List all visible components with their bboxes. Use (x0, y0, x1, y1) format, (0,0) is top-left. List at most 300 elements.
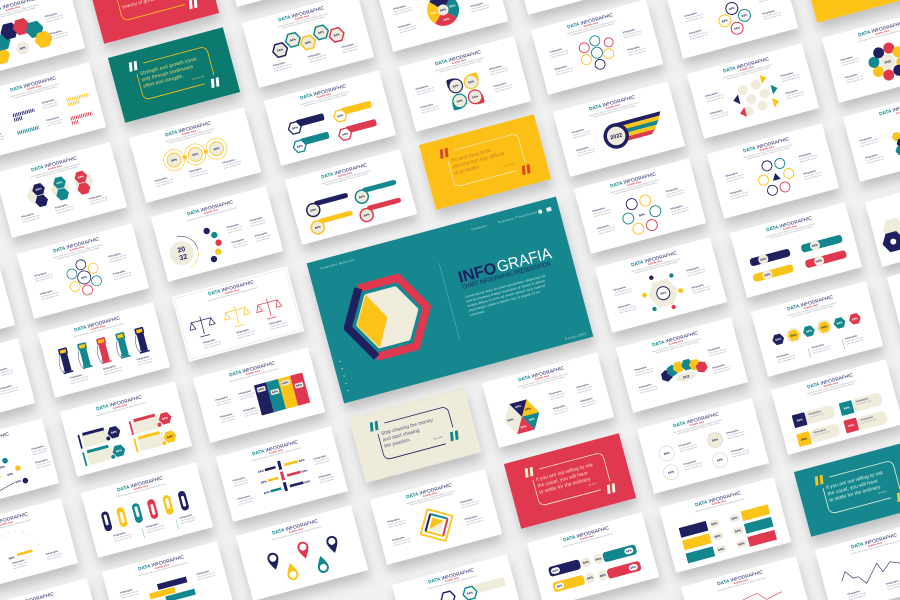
text block: Lorem ipsum dolor sit (203, 340, 222, 347)
heading: Subtitle Here (269, 448, 284, 455)
text block: Infographic (155, 176, 169, 183)
arc blocks chart: 2022 (682, 374, 690, 380)
text block: Infographic (859, 136, 873, 142)
side dots (339, 361, 349, 391)
slide: petals with arrows (707, 123, 839, 219)
text block: amet consectetur elit (22, 216, 40, 224)
heading: Subtitle Here (317, 92, 332, 99)
text block: Lorem ipsum dolor (216, 398, 232, 405)
cover header labels: Business Presentation (498, 210, 538, 224)
four squares chart: 64% (848, 423, 855, 428)
text block: Infographic (725, 172, 739, 178)
chart values: 64% (638, 212, 646, 218)
slide: map pins (236, 505, 368, 600)
heading: DATA INFOGRAPHIC (117, 475, 164, 493)
dots chart: 64% (7, 472, 14, 477)
text block (808, 409, 825, 419)
pills chart: 64% (582, 560, 590, 565)
text block: Infographic (844, 334, 858, 341)
heading (433, 49, 485, 74)
chart values: 64% (734, 25, 741, 31)
chart values (662, 437, 724, 476)
quote mark open (813, 475, 825, 486)
text block: Infographic (113, 531, 127, 538)
text block: Infographic (627, 45, 641, 52)
text block: amet consectetur (233, 243, 248, 249)
wing bars (616, 111, 665, 142)
heading (227, 360, 279, 383)
text block (684, 10, 704, 23)
text block: Lorem ipsum dolor sit (223, 160, 242, 167)
text block: Lorem ipsum dolor sit (197, 571, 216, 579)
text block: Infographic (549, 47, 563, 54)
heading: Subtitle Here (690, 420, 705, 427)
text block: Lorem ipsum dolor sit (731, 448, 750, 456)
text block (238, 389, 256, 401)
text block: Infographic (273, 61, 287, 67)
text block: amet consectetur elit (198, 574, 216, 581)
slide: red line chart bottom (681, 556, 813, 600)
ribbons chart (679, 504, 777, 563)
text block: Lorem ipsum dolor sit (848, 591, 867, 599)
text block: Lorem ipsum dolor sit (708, 347, 727, 355)
six rings chart (618, 192, 665, 237)
heading: DATA INFOGRAPHIC (165, 120, 212, 138)
text block: Infographic (712, 363, 726, 370)
chart values: 64% (821, 324, 828, 330)
slide: triangles and rings (666, 0, 798, 59)
text block (398, 21, 418, 34)
hexagon pie chart: 64% (529, 417, 536, 422)
flag panels: 64% (115, 448, 123, 453)
quote text: the usual, you will have (827, 478, 879, 497)
quote frame (531, 452, 611, 506)
text block: Infographic (243, 406, 257, 413)
text block: amet consectetur elit (763, 13, 781, 21)
text block: Infographic (865, 153, 879, 160)
text block: Infographic (237, 494, 251, 501)
heading: Subtitle Here (824, 381, 839, 388)
colour columns chart: 64% (258, 386, 265, 392)
pie chart: 64% (449, 3, 456, 9)
text block (420, 102, 440, 114)
text block: Infographic (705, 92, 719, 98)
cover hexagon logo (339, 272, 436, 362)
text block: Lorem ipsum dolor (809, 412, 825, 419)
hexagon pairs chart: 64% (77, 174, 85, 180)
text block: Infographic (55, 203, 69, 210)
text block: amet consectetur elit (114, 535, 132, 543)
text block: amet consectetur (36, 463, 51, 470)
text block: Lorem ipsum dolor (35, 460, 52, 467)
heading: Lorem ipsum dolor sit amet consectetur adipiscing elit sed do (631, 257, 681, 273)
rings chart (161, 136, 229, 173)
text block: Lorem ipsum dolor sit (845, 336, 864, 343)
text block: Infographic (470, 2, 484, 8)
text block: amet consectetur elit (156, 180, 174, 188)
text block: Infographic (707, 346, 721, 352)
slide: scales (172, 266, 304, 362)
heading (51, 236, 103, 261)
dots chart: 64% (15, 479, 22, 484)
text block: amet consectetur elit (640, 387, 658, 395)
text block: amet consectetur elit (577, 150, 595, 157)
text block: Lorem ipsum dolor sit (0, 386, 18, 393)
text block: Lorem ipsum dolor sit (146, 524, 165, 532)
text block: Infographic (88, 194, 102, 201)
text block (844, 333, 864, 346)
flag panels: 64% (167, 434, 174, 439)
heading: DATA INFOGRAPHIC (610, 171, 657, 189)
text block: Infographic (49, 29, 63, 36)
heading (8, 75, 60, 100)
text block: amet consectetur elit (495, 86, 513, 93)
text block: amet consectetur elit (109, 256, 127, 264)
text block: amet consectetur elit (417, 89, 435, 96)
chart values: 64% (333, 32, 340, 38)
heading: DATA INFOGRAPHIC (695, 490, 742, 508)
quote text: Tony Hsieh (433, 436, 443, 441)
heading: eiusmod tempor incididunt ut labore et dolore magna (410, 492, 454, 507)
hatched bars chart (13, 95, 94, 137)
heading: DATA INFOGRAPHIC (138, 554, 185, 572)
heading: Lorem ipsum dolor sit amet consectetur adipiscing elit sed do (695, 497, 745, 513)
text block: amet consectetur elit (782, 75, 800, 83)
text block: amet consectetur elit (777, 357, 796, 364)
text block: Lorem ipsum dolor (47, 118, 63, 125)
text block: Infographic (46, 116, 60, 122)
text block (785, 87, 805, 100)
chart values (275, 26, 340, 53)
ribbons chart: 64% (738, 541, 745, 547)
text block: Infographic (420, 103, 434, 109)
pie chart: 64% (443, 17, 450, 22)
text block: amet consectetur (315, 459, 330, 466)
slide: chain column (216, 426, 348, 522)
heading (250, 439, 302, 462)
text block (392, 534, 412, 547)
text block: amet consectetur elit (121, 592, 139, 600)
heading: Subtitle Here (134, 484, 149, 491)
heading: DATA INFOGRAPHIC (321, 162, 368, 180)
text block: Lorem ipsum dolor sit (40, 291, 59, 299)
text block: Lorem ipsum dolor (577, 385, 593, 392)
text block: Lorem ipsum dolor sit (190, 169, 208, 176)
colour columns chart: 64% (271, 389, 279, 394)
text block (215, 395, 233, 407)
text block (49, 28, 69, 41)
heading: Lorem ipsum dolor sit amet consectetur adipiscing elit sed do (10, 82, 60, 98)
text block: Lorem ipsum dolor (580, 399, 597, 406)
gauge chart: 64% (8, 555, 15, 561)
year circle (166, 233, 202, 272)
text block (222, 157, 242, 170)
quote text: efficient but very difficult (452, 151, 506, 170)
text block: Infographic (387, 517, 401, 524)
heading: DATA INFOGRAPHIC (406, 482, 453, 500)
text block: Infographic (179, 513, 193, 520)
text block: amet consectetur elit (204, 342, 222, 350)
slide: star network (595, 237, 727, 333)
heading: Subtitle Here (712, 499, 727, 506)
heading: DATA INFOGRAPHIC (787, 294, 834, 312)
heading: Lorem ipsum dolor sit amet consectetur adipiscing elit sed do (673, 418, 723, 434)
text block: Infographic (34, 271, 48, 278)
text block (840, 54, 860, 67)
text block: Lorem ipsum dolor sit (799, 153, 818, 161)
ring bars chart: 64% (310, 207, 317, 213)
dots chart (0, 454, 29, 493)
text block (886, 578, 900, 591)
partial chart (891, 130, 900, 156)
quote text: Henry Kaiser (503, 163, 515, 168)
text block: Infographic (639, 383, 653, 389)
slide: ring cluster (531, 0, 663, 95)
rings chart: 64% (213, 146, 220, 151)
heading (565, 12, 617, 37)
quote text: Strength and growth come (139, 56, 198, 77)
heading: Lorem ipsum dolor sit amet consectetur adipiscing elit sed do (428, 574, 478, 590)
colour columns chart: 64% (282, 380, 289, 385)
heading: Subtitle Here (225, 288, 240, 295)
text block (592, 205, 612, 218)
text block: Infographic (678, 441, 692, 448)
line chart (716, 587, 784, 600)
hexagon fan chart: 64% (19, 45, 26, 51)
text block (665, 186, 685, 199)
heading (849, 532, 900, 555)
text block (712, 362, 732, 375)
cover header labels: Corporate Business (320, 257, 355, 270)
heading: eiusmod tempor incididunt ut labore et dolore magna (325, 172, 369, 187)
slide: hexagon fan (0, 0, 85, 79)
slide: hexagon chain (242, 0, 374, 88)
heading (856, 20, 900, 43)
text block: amet consectetur elit (841, 60, 859, 67)
icon: header circle (538, 209, 543, 214)
text block: Infographic (196, 570, 210, 576)
text block (69, 372, 89, 385)
heading (650, 330, 702, 355)
heading: Lorem ipsum dolor sit amet consectetur adipiscing elit sed do (567, 19, 617, 35)
heading: DATA INFOGRAPHIC (208, 279, 255, 297)
text block: Lorem ipsum dolor sit (777, 354, 796, 362)
quote text: Jim Rohn (588, 483, 597, 487)
chart values: 64% (277, 47, 284, 53)
heading: eiusmod tempor incididunt ut labore et dolore magna (811, 382, 855, 397)
four circles chart (657, 431, 730, 482)
slide: arc blocks (616, 317, 748, 413)
text block (634, 364, 654, 377)
text block: Infographic (103, 364, 117, 371)
quote mark (187, 0, 199, 9)
arrow pills chart: 64% (816, 258, 823, 264)
text block: Lorem ipsum dolor (250, 218, 266, 225)
heading (163, 120, 215, 145)
quote text: Jim Rohn (878, 491, 887, 495)
quote text (535, 462, 599, 500)
text block: amet consectetur (244, 411, 259, 418)
heading: eiusmod tempor incididunt ut labore et dolore magna (727, 66, 771, 81)
text block: Infographic (576, 383, 590, 389)
ribbons chart: 64% (735, 528, 742, 534)
slide: red quote top (87, 0, 219, 44)
text block (136, 354, 154, 367)
text block: amet consectetur elit (71, 377, 89, 385)
heading (276, 5, 328, 30)
heading: Lorem ipsum dolor sit amet consectetur adipiscing elit sed do (787, 301, 837, 317)
hexagon bars chart: 64% (291, 125, 299, 131)
text block: Infographic (762, 9, 776, 16)
text block (554, 64, 574, 76)
heading (94, 394, 146, 417)
heading: DATA INFOGRAPHIC (567, 12, 614, 30)
heading: DATA INFOGRAPHIC (74, 315, 121, 333)
quote text (139, 55, 205, 94)
heading (270, 518, 322, 541)
text block: Infographic (35, 458, 49, 464)
chart values: 64% (305, 40, 312, 45)
text block: amet consectetur elit (466, 519, 484, 526)
heading: Subtitle Here (584, 21, 599, 28)
heading: DATA INFOGRAPHIC (717, 569, 764, 587)
heading: eiusmod tempor incididunt ut labore et dolore magna (522, 375, 566, 390)
text block (40, 288, 60, 301)
heading: Lorem ipsum dolor sit amet consectetur adipiscing elit sed do (807, 379, 857, 395)
heading (587, 94, 639, 119)
text block (341, 42, 359, 54)
heading: DATA INFOGRAPHIC (723, 56, 770, 74)
text block: amet consectetur elit (593, 211, 611, 218)
heading (608, 171, 660, 196)
pie chart: 64% (430, 10, 437, 16)
slide: ribbons with percentages (659, 477, 791, 573)
text block (670, 203, 690, 216)
pills chart: 64% (556, 583, 563, 589)
quote mark open (368, 421, 380, 432)
text block: Infographic (113, 269, 127, 276)
text block (686, 265, 706, 278)
text block: Lorem ipsum dolor sit (841, 57, 859, 65)
cover title: INFO (457, 260, 499, 287)
text block: amet consectetur (43, 103, 58, 110)
text block: Lorem ipsum dolor sit (471, 3, 490, 11)
heading: DATA INFOGRAPHIC (807, 372, 854, 390)
heading: Subtitle Here (338, 171, 353, 178)
text block: amet consectetur elit (861, 140, 879, 148)
text block: Infographic (549, 390, 563, 396)
chart values: 64% (851, 316, 859, 322)
text block: Lorem ipsum dolor sit (109, 253, 127, 261)
text block: Infographic (464, 515, 478, 521)
main slide: Infografia cover (307, 197, 593, 403)
heading: Lorem ipsum dolor sit amet consectetur adipiscing elit sed do (272, 525, 322, 541)
flag panels: 64% (111, 429, 118, 435)
text block: amet consectetur elit (800, 156, 818, 164)
text block (731, 446, 751, 459)
heading: eiusmod tempor incididunt ut labore et dolore magna (635, 260, 679, 275)
hexagon bars chart: 64% (296, 143, 304, 149)
heading: Subtitle Here (760, 145, 775, 152)
heading: DATA INFOGRAPHIC (563, 525, 610, 543)
quote text: to be better. (454, 164, 481, 177)
text block: amet consectetur elit (866, 157, 884, 165)
text block (683, 458, 703, 471)
quote mark open (438, 148, 450, 159)
cover header labels (320, 208, 538, 272)
text block: amet consectetur elit (114, 274, 132, 281)
hexagon bars chart: 64% (337, 113, 344, 118)
text block (549, 389, 566, 401)
text block: Lorem ipsum dolor sit (270, 321, 288, 328)
text block (318, 472, 336, 484)
text block: Infographic (683, 460, 697, 466)
slide: left sliver (0, 260, 15, 356)
quote text: the usual, you will have (537, 470, 589, 489)
heading: DATA INFOGRAPHIC (252, 439, 299, 457)
heading: eiusmod tempor incididunt ut labore et dolore magna (571, 22, 615, 37)
text block (725, 170, 745, 183)
text block: Lorem ipsum dolor sit (710, 110, 729, 118)
text block (146, 521, 166, 534)
text block (865, 152, 885, 165)
text block: amet consectetur (47, 121, 63, 127)
text block: amet consectetur elit (685, 464, 703, 471)
heading: DATA INFOGRAPHIC (278, 5, 325, 23)
heading: Lorem ipsum dolor sit amet consectetur adipiscing elit sed do (165, 127, 215, 143)
heading: Lorem ipsum dolor sit amet consectetur adipiscing elit sed do (652, 337, 702, 353)
text block (776, 351, 796, 364)
chart values (775, 316, 859, 342)
text block: Infographic (236, 328, 250, 335)
text block: Lorem ipsum dolor sit (113, 271, 132, 279)
heading: Subtitle Here (669, 339, 684, 346)
heading: Subtitle Here (91, 324, 106, 331)
rings chart: 64% (171, 157, 178, 163)
text block (103, 363, 123, 376)
text block: Infographic (220, 412, 234, 419)
text block (313, 454, 331, 466)
text block: Lorem ipsum dolor (227, 225, 243, 232)
text block: Lorem ipsum dolor sit (597, 225, 616, 233)
heading: eiusmod tempor incididunt ut labore et dolore magna (169, 130, 213, 145)
chain chart: 64% (263, 490, 271, 495)
text block: Infographic (813, 428, 827, 434)
text block (813, 427, 830, 437)
quote text: Napoleon Hill (192, 76, 205, 81)
chart values: 64% (717, 457, 724, 463)
text block (726, 427, 746, 440)
text block: Lorem ipsum dolor sit (679, 443, 698, 450)
slide: dots and lines (0, 418, 59, 514)
text block (31, 444, 49, 456)
text block: Infographic (710, 109, 724, 115)
text block: Lorem ipsum dolor sit (572, 129, 591, 137)
text block: Infographic (811, 343, 825, 349)
text block: Infographic (776, 352, 790, 359)
text block (627, 44, 647, 57)
cover body text: commodo. (470, 309, 486, 317)
text block: amet consectetur elit (393, 540, 411, 547)
text block (803, 168, 823, 181)
heading: Subtitle Here (445, 576, 460, 583)
text block: amet consectetur elit (628, 49, 646, 57)
text block: amet consectetur (138, 360, 153, 367)
text block (269, 318, 289, 331)
heading: DATA INFOGRAPHIC (518, 365, 565, 383)
text block: Infographic (665, 187, 679, 193)
text block: Infographic (845, 73, 859, 79)
